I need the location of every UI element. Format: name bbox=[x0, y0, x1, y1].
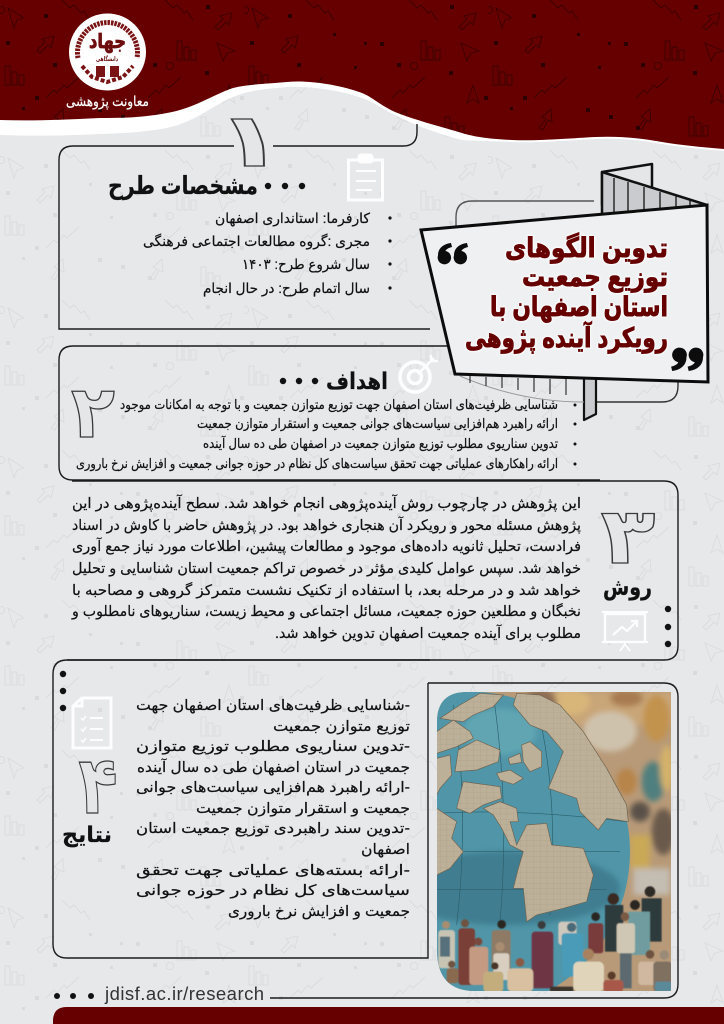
label: method: روش bbox=[603, 574, 652, 601]
results text: توزیع متوازن جمعیت bbox=[273, 719, 410, 735]
method paragraph: خواهد شد. سپس عوامل کلیدی مؤثر در خصوص تراکم جمعیت استان شناسایی و تحلیل bbox=[72, 561, 581, 577]
continents bbox=[437, 693, 628, 922]
icon: opening quote bbox=[438, 243, 468, 264]
results text: جمعیت و استقرار متوازن جمعیت bbox=[196, 801, 410, 817]
photo: globe and crowd bbox=[437, 692, 671, 991]
results text: -تدوین سناریوی مطلوب توزیع متوازن bbox=[136, 739, 410, 755]
panel: method bbox=[67, 481, 678, 660]
goals list bbox=[76, 397, 576, 472]
results text: جمعیت و افزایش نرخ باروری bbox=[228, 904, 410, 920]
specs list: کارفرما: استانداری اصفهان bbox=[215, 210, 370, 227]
panel: goals bbox=[59, 201, 678, 480]
goals list: ارائه راهکارهای عملیاتی جهت تحقق سیاست‌های کل نظام در حوزه جوانی جمعیت و افزایش نرخ باروری bbox=[76, 456, 558, 472]
ribs under banner bbox=[470, 376, 566, 395]
method paragraph: مطلوب برای آینده جمعیت اصفهان تدوین خواهد شد. bbox=[275, 624, 581, 642]
title text: تدوین الگوهای bbox=[505, 232, 668, 264]
back frame behind title bbox=[456, 201, 594, 232]
results text: جمعیت در استان اصفهان طی ده سال آینده bbox=[137, 758, 410, 776]
method paragraph: خواهد شد و در مرحله بعد، با استفاده از تکنیک نشست متمرکز گروهی و مصاحبه با bbox=[72, 582, 581, 599]
results text bbox=[136, 698, 410, 920]
specs list: مجری :گروه مطالعات اجتماعی فرهنگی bbox=[143, 233, 370, 250]
specs list bbox=[143, 210, 392, 297]
title text: استان اصفهان با bbox=[490, 292, 668, 323]
footer link: jdisf.ac.ir/research bbox=[104, 983, 265, 1004]
specs list: سال شروع طرح: ۱۴۰۳ bbox=[242, 256, 370, 273]
icon: clipboard bbox=[348, 155, 382, 200]
results text: اصفهان bbox=[361, 842, 410, 858]
results text: -تدوین سند راهبردی توزیع جمعیت استان bbox=[136, 821, 410, 837]
heading: specs: مشخصات طرح bbox=[108, 172, 258, 201]
dots bbox=[665, 606, 671, 647]
panel: results bbox=[53, 660, 430, 958]
panel: specs bbox=[59, 99, 430, 329]
icon: presentation board bbox=[602, 612, 648, 651]
globe bbox=[437, 692, 630, 991]
icon: closing quote bbox=[671, 348, 703, 371]
specs list: سال اتمام طرح: در حال انجام bbox=[203, 280, 370, 297]
logo: جهاد bbox=[89, 31, 126, 53]
logo: دانشگاهی bbox=[96, 55, 118, 63]
method paragraph: فرادست، تحلیل ثانویه داده‌های موجود و مطالعات پیشین، اطلاعات مورد نیاز جمع آوری bbox=[72, 537, 581, 555]
header wave bbox=[0, 0, 724, 151]
title text bbox=[465, 232, 668, 354]
footer bar bbox=[53, 1007, 724, 1024]
heading dots bbox=[265, 183, 305, 189]
goals list: ارائه راهبرد هم‌افزایی سیاست‌های جوانی جمعیت و استقرار متوازن جمعیت bbox=[197, 416, 558, 432]
method paragraph: نخبگان و مطلعین حوزه جمعیت، مسائل اجتماعی و محیط زیست، سناریوهای نامطلوب و bbox=[71, 603, 581, 620]
dots bbox=[60, 671, 66, 711]
icon: target bbox=[400, 355, 438, 392]
goals list: شناسایی ظرفیت‌های استان اصفهان جهت توزیع متوازن جمعیت و با توجه به امکانات موجود bbox=[120, 397, 558, 413]
method paragraph: پژوهش مسئله محور و رویکرد آن هنجاری خواهد بود. در پژوهش حاضر با کاوش در اسناد bbox=[72, 516, 581, 534]
method paragraph bbox=[71, 494, 581, 642]
number 3: ۳ bbox=[601, 492, 655, 580]
heading: goals: اهداف bbox=[326, 368, 388, 394]
crowd bbox=[438, 886, 672, 992]
logo bbox=[69, 14, 146, 90]
title ribbon folds bbox=[460, 164, 707, 420]
title text: رویکرد آینده پژوهی bbox=[465, 321, 668, 354]
results text: -ارائه راهبرد هم‌افزایی سیاست‌های جوانی bbox=[136, 780, 410, 796]
icon: checklist bbox=[73, 698, 111, 748]
goals list: تدوین سناریوی مطلوب توزیع متوازن جمعیت در اصفهان طی ده سال آینده bbox=[203, 435, 558, 452]
number 4: ۴ bbox=[78, 741, 118, 831]
title banner bbox=[421, 205, 708, 395]
title text: توزیع جمعیت bbox=[522, 262, 668, 293]
results text: -ارائه بسته‌های عملیاتی جهت تحقق bbox=[136, 863, 410, 879]
number 2: ۲ bbox=[71, 373, 115, 453]
image frame bbox=[270, 683, 678, 998]
method paragraph: این پژوهش در چارچوب روش آینده‌پژوهی انجام خواهد شد. سطح آینده‌پژوهی در این bbox=[72, 494, 581, 512]
results text: -شناسایی ظرفیت‌های استان اصفهان جهت bbox=[136, 698, 410, 714]
number 1: ۱ bbox=[216, 99, 284, 182]
heading dots bbox=[280, 378, 318, 384]
logo caption: معاونت پژوهشی bbox=[66, 93, 149, 110]
label: results: نتایج bbox=[62, 822, 112, 848]
results text: سیاست‌های کل نظام در حوزه جوانی bbox=[136, 883, 410, 899]
